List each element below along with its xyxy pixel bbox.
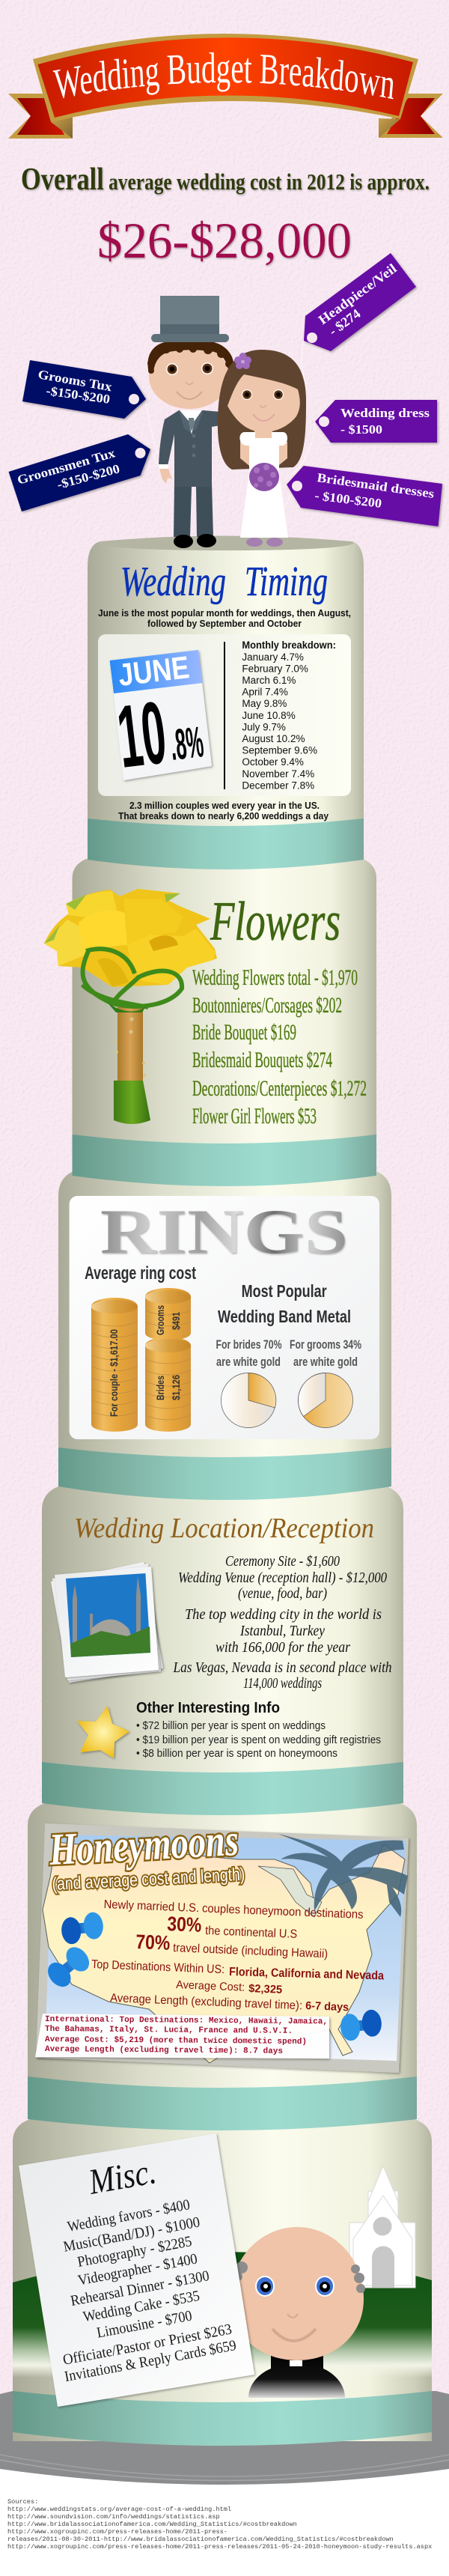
white gold percentages	[216, 1337, 361, 1369]
venue and city text: 114,000 weddings	[243, 1675, 322, 1692]
coin labels: $1,126	[170, 1375, 182, 1400]
tier 4: wedding location and reception	[42, 1486, 403, 1815]
wedding timing heading: Wedding	[120, 559, 226, 605]
location heading: Wedding Location/Reception	[74, 1513, 374, 1544]
venue and city text: with 166,000 for the year	[216, 1639, 350, 1656]
bride	[218, 350, 306, 547]
coin stacks	[91, 1288, 191, 1432]
flower costs: Bridesmaid Bouquets $274	[192, 1048, 332, 1072]
white gold percentages: For brides 70%	[216, 1337, 281, 1352]
most popular metal heading: Most Popular	[242, 1281, 327, 1301]
international box	[35, 2014, 329, 2059]
sources: http://www.weddingstats.org/average-cost-of-a-wedding.html	[7, 2506, 231, 2513]
flower costs	[192, 965, 367, 1128]
monthly breakdown: July 9.7%	[242, 722, 286, 732]
paper: misc list	[19, 2133, 254, 2407]
timing intro: followed by September and October	[147, 618, 302, 629]
sources: releases/2011-08-30-2011-http://www.bridalassociationofamerica.com/Wedding_Statistics/#costbreakdown	[7, 2536, 394, 2543]
flower costs: Boutonnieres/Corsages $202	[192, 993, 342, 1018]
honeymoon stats: the continental U.S	[205, 1925, 297, 1941]
misc items: Invitations & Reply Cards $659	[63, 2337, 237, 2385]
tier 5 body	[28, 1803, 417, 2119]
tag: wedding dress: Wedding dress	[340, 406, 430, 420]
other interesting info heading: Other Interesting Info	[136, 1700, 280, 1716]
honeymoon stats: Newly married U.S. couples honeymoon destinations	[103, 1898, 364, 1922]
rings panel	[70, 1196, 379, 1439]
misc items: Wedding favors - $400	[66, 2196, 192, 2235]
other info bullets	[136, 1720, 381, 1760]
misc items: Wedding Cake - $535	[82, 2288, 201, 2325]
tier 5: honeymoons	[28, 1803, 417, 2130]
monthly breakdown: March 6.1%	[242, 675, 296, 686]
international box: Average Length (excluding travel time): 8.7 days	[45, 2045, 283, 2056]
misc items: Officiate/Pastor or Priest $263	[61, 2321, 233, 2369]
tier 4 band	[42, 1762, 403, 1815]
tier 6 band	[13, 2391, 432, 2446]
tier 3 band	[58, 1448, 391, 1500]
tier 2 body	[72, 859, 376, 1176]
honeymoon stats	[91, 1898, 384, 2014]
hill	[13, 2252, 432, 2378]
honeymoon stats: 30%	[167, 1913, 202, 1936]
misc items: Rehearsal Dinner - $1300	[69, 2267, 210, 2309]
venue and city text: Wedding Venue (reception hall) - $12,000	[178, 1570, 387, 1586]
flowers heading: Flowers	[210, 891, 340, 953]
monthly breakdown: Monthly breakdown:	[242, 640, 336, 651]
groom head	[149, 344, 230, 409]
white gold percentages: are white gold	[293, 1355, 358, 1369]
honeymoon stats: Florida, California and Nevada	[229, 1966, 384, 1982]
tag: wedding dress	[315, 400, 437, 443]
tag: groomsmen tux: -$150-$200	[55, 461, 121, 492]
coin labels: $491	[170, 1312, 182, 1330]
calendar icon: .8%	[168, 717, 206, 770]
tag: grooms tux: -$150-$200	[45, 383, 111, 407]
tag: headpiece	[304, 253, 416, 351]
misc items: Photography - $2285	[76, 2233, 193, 2270]
honeymoon stats: 70%	[135, 1931, 171, 1954]
couples per year	[118, 800, 329, 821]
coin labels: Brides	[154, 1376, 166, 1400]
calendar icon: 10	[112, 683, 171, 787]
misc items: Limousine - $700	[95, 2308, 193, 2342]
honeymoon map card	[35, 1815, 409, 2073]
tag: groomsmen tux	[9, 434, 150, 511]
misc items: Videographer - $1400	[76, 2251, 199, 2289]
sources: Sources:	[7, 2498, 38, 2506]
most popular metal heading	[218, 1281, 351, 1326]
white gold percentages: For grooms 34%	[290, 1337, 361, 1352]
price tag: strings	[146, 341, 315, 509]
bride hair flower	[234, 353, 251, 369]
sources: http://www.xogroupinc.com/press-releases-home/2011-press-releases/2011-05-24-2010-honeymoon-study-results.aspx	[7, 2543, 432, 2551]
wedding timing heading: Timing	[245, 559, 328, 605]
tag: bridesmaid dresses: Bridesmaid dresses	[316, 470, 436, 501]
monthly breakdown: January 4.7%	[242, 651, 304, 663]
timing panel	[98, 634, 351, 796]
bouquet	[44, 889, 217, 1124]
international box: International: Top Destinations: Mexico, Hawaii, Jamaica,	[45, 2015, 328, 2026]
groom suit	[174, 483, 213, 537]
tier 6 body	[13, 2119, 432, 2441]
sources	[7, 2498, 432, 2551]
tier 4 body	[42, 1486, 403, 1803]
international box: The Bahamas, Italy, St. Lucia, France and U.S.V.I.	[45, 2025, 293, 2036]
pie: brides	[222, 1373, 276, 1427]
honeymoons subheading: (and average cost and length)	[52, 1865, 245, 1895]
tier 1 band	[88, 818, 364, 869]
flower costs: Flower Girl Flowers $53	[192, 1104, 317, 1128]
monthly breakdown: August 10.2%	[242, 733, 305, 744]
tag: grooms tux: Grooms Tux	[37, 367, 114, 394]
honeymoon stats: Top Destinations Within US:	[91, 1958, 224, 1976]
misc heading: Misc.	[85, 2151, 159, 2202]
bride hair	[218, 350, 306, 470]
divider	[224, 642, 225, 789]
US map	[43, 1842, 405, 2063]
pie: grooms	[298, 1373, 353, 1427]
couples per year: That breaks down to nearly 6,200 weddings a day	[118, 810, 329, 821]
coin labels: Grooms	[154, 1305, 166, 1335]
tier 1: wedding timing	[88, 536, 364, 869]
other info bullets: • $19 billion per year is spent on wedding gift registries	[136, 1734, 381, 1746]
tag: wedding dress: - $1500	[340, 422, 382, 437]
venue and city text: (venue, food, bar)	[238, 1585, 327, 1602]
tag: grooms tux	[22, 360, 146, 419]
monthly breakdown: April 7.4%	[242, 686, 288, 698]
banner title: Wedding Budget Breakdown	[52, 52, 394, 99]
priest	[228, 2227, 365, 2398]
coin labels	[108, 1305, 182, 1417]
tier 5 band	[28, 2077, 417, 2130]
banner	[8, 34, 443, 139]
monthly breakdown: May 9.8%	[242, 698, 287, 709]
average ring cost heading: Average ring cost	[85, 1263, 196, 1284]
timing intro	[98, 607, 351, 629]
timing intro: June is the most popular month for weddings, then August,	[98, 607, 351, 619]
monthly breakdown: October 9.4%	[242, 756, 304, 768]
groom	[147, 296, 234, 548]
tier 3: rings	[58, 1172, 391, 1500]
couples per year: 2.3 million couples wed every year in the US.	[129, 800, 320, 811]
venue and city text: Istanbul, Turkey	[239, 1623, 325, 1639]
tag: headpiece: - $274	[326, 306, 363, 338]
palm tree	[278, 1834, 408, 1917]
other info bullets: • $72 billion per year is spent on weddings	[136, 1720, 326, 1732]
right ribbon tail	[379, 94, 443, 138]
sources: http://www.bridalassociationofamerica.com/Wedding_Statistics/#costbreakdown	[7, 2521, 297, 2528]
other info bullets: • $8 billion per year is spent on honeymoons	[136, 1748, 337, 1760]
left ribbon tail	[8, 94, 73, 139]
price figure: $26-$28,000	[97, 212, 352, 269]
flower costs: Bride Bouquet $169	[192, 1020, 296, 1045]
tag: headpiece: Headpiece/Veil	[316, 261, 400, 327]
calendar icon: JUNE	[117, 649, 191, 693]
bridal bouquet	[249, 463, 279, 491]
white gold percentages: are white gold	[216, 1355, 281, 1369]
tag: bridesmaid dresses	[287, 466, 442, 526]
honeymoons heading: Honeymoons	[47, 1815, 239, 1874]
tier 2 band	[72, 1134, 376, 1186]
venue and city text: Las Vegas, Nevada is in second place with	[173, 1659, 391, 1676]
polaroid photo of mosque	[51, 1562, 163, 1683]
pins	[43, 1912, 383, 2041]
monthly breakdown: June 10.8%	[242, 710, 296, 721]
monthly breakdown: February 7.0%	[242, 663, 308, 674]
venue and city text: The top wedding city in the world is	[185, 1606, 382, 1623]
venue and city text: Ceremony Site - $1,600	[225, 1553, 340, 1570]
honeymoon stats: $2,325	[248, 1982, 282, 1996]
tier 6: misc	[13, 2119, 432, 2446]
honeymoon stats: Average Length (excluding travel time):	[110, 1992, 302, 2012]
tag: groomsmen tux: Groomsmen Tux	[16, 446, 117, 487]
honeymoon stats: travel outside (including Hawaii)	[173, 1942, 328, 1960]
cake top surface	[99, 536, 354, 550]
cake plate	[0, 2391, 449, 2485]
misc items: Music(Band/DJ) - $1000	[62, 2214, 201, 2255]
venue and city text	[173, 1553, 391, 1692]
bride dress	[240, 438, 288, 538]
bride face	[227, 374, 300, 432]
monthly breakdown: November 7.4%	[242, 768, 314, 780]
tag: bridesmaid dresses: - $100-$200	[314, 488, 382, 511]
coin labels: For couple - $1,617.00	[108, 1329, 120, 1417]
international box: Average Cost: $5,219 (more than twice domestic spend)	[45, 2035, 307, 2047]
monthly breakdown: December 7.8%	[242, 780, 314, 791]
rings heading: RINGS	[100, 1197, 348, 1267]
monthly breakdown	[242, 640, 336, 791]
sources: http://www.soundvision.com/info/weddings/statistics.asp	[7, 2513, 220, 2521]
bride neck and arms	[240, 427, 287, 469]
misc items	[61, 2196, 237, 2385]
monthly breakdown: September 9.6%	[242, 744, 317, 756]
most popular metal heading: Wedding Band Metal	[218, 1307, 351, 1326]
tier 2: flowers	[44, 859, 376, 1186]
tier 1 body	[88, 536, 364, 860]
church	[349, 2166, 415, 2288]
ribbon body	[33, 34, 418, 122]
groom top hat	[151, 296, 229, 342]
tier 3 body	[58, 1172, 391, 1486]
sources: http://www.xogroupinc.com/press-releases-home/2011-press-	[7, 2528, 227, 2536]
honeymoon stats: 6-7 days	[305, 1999, 349, 2014]
star icon	[77, 1706, 129, 1758]
honeymoon stats: Average Cost:	[176, 1978, 245, 1994]
